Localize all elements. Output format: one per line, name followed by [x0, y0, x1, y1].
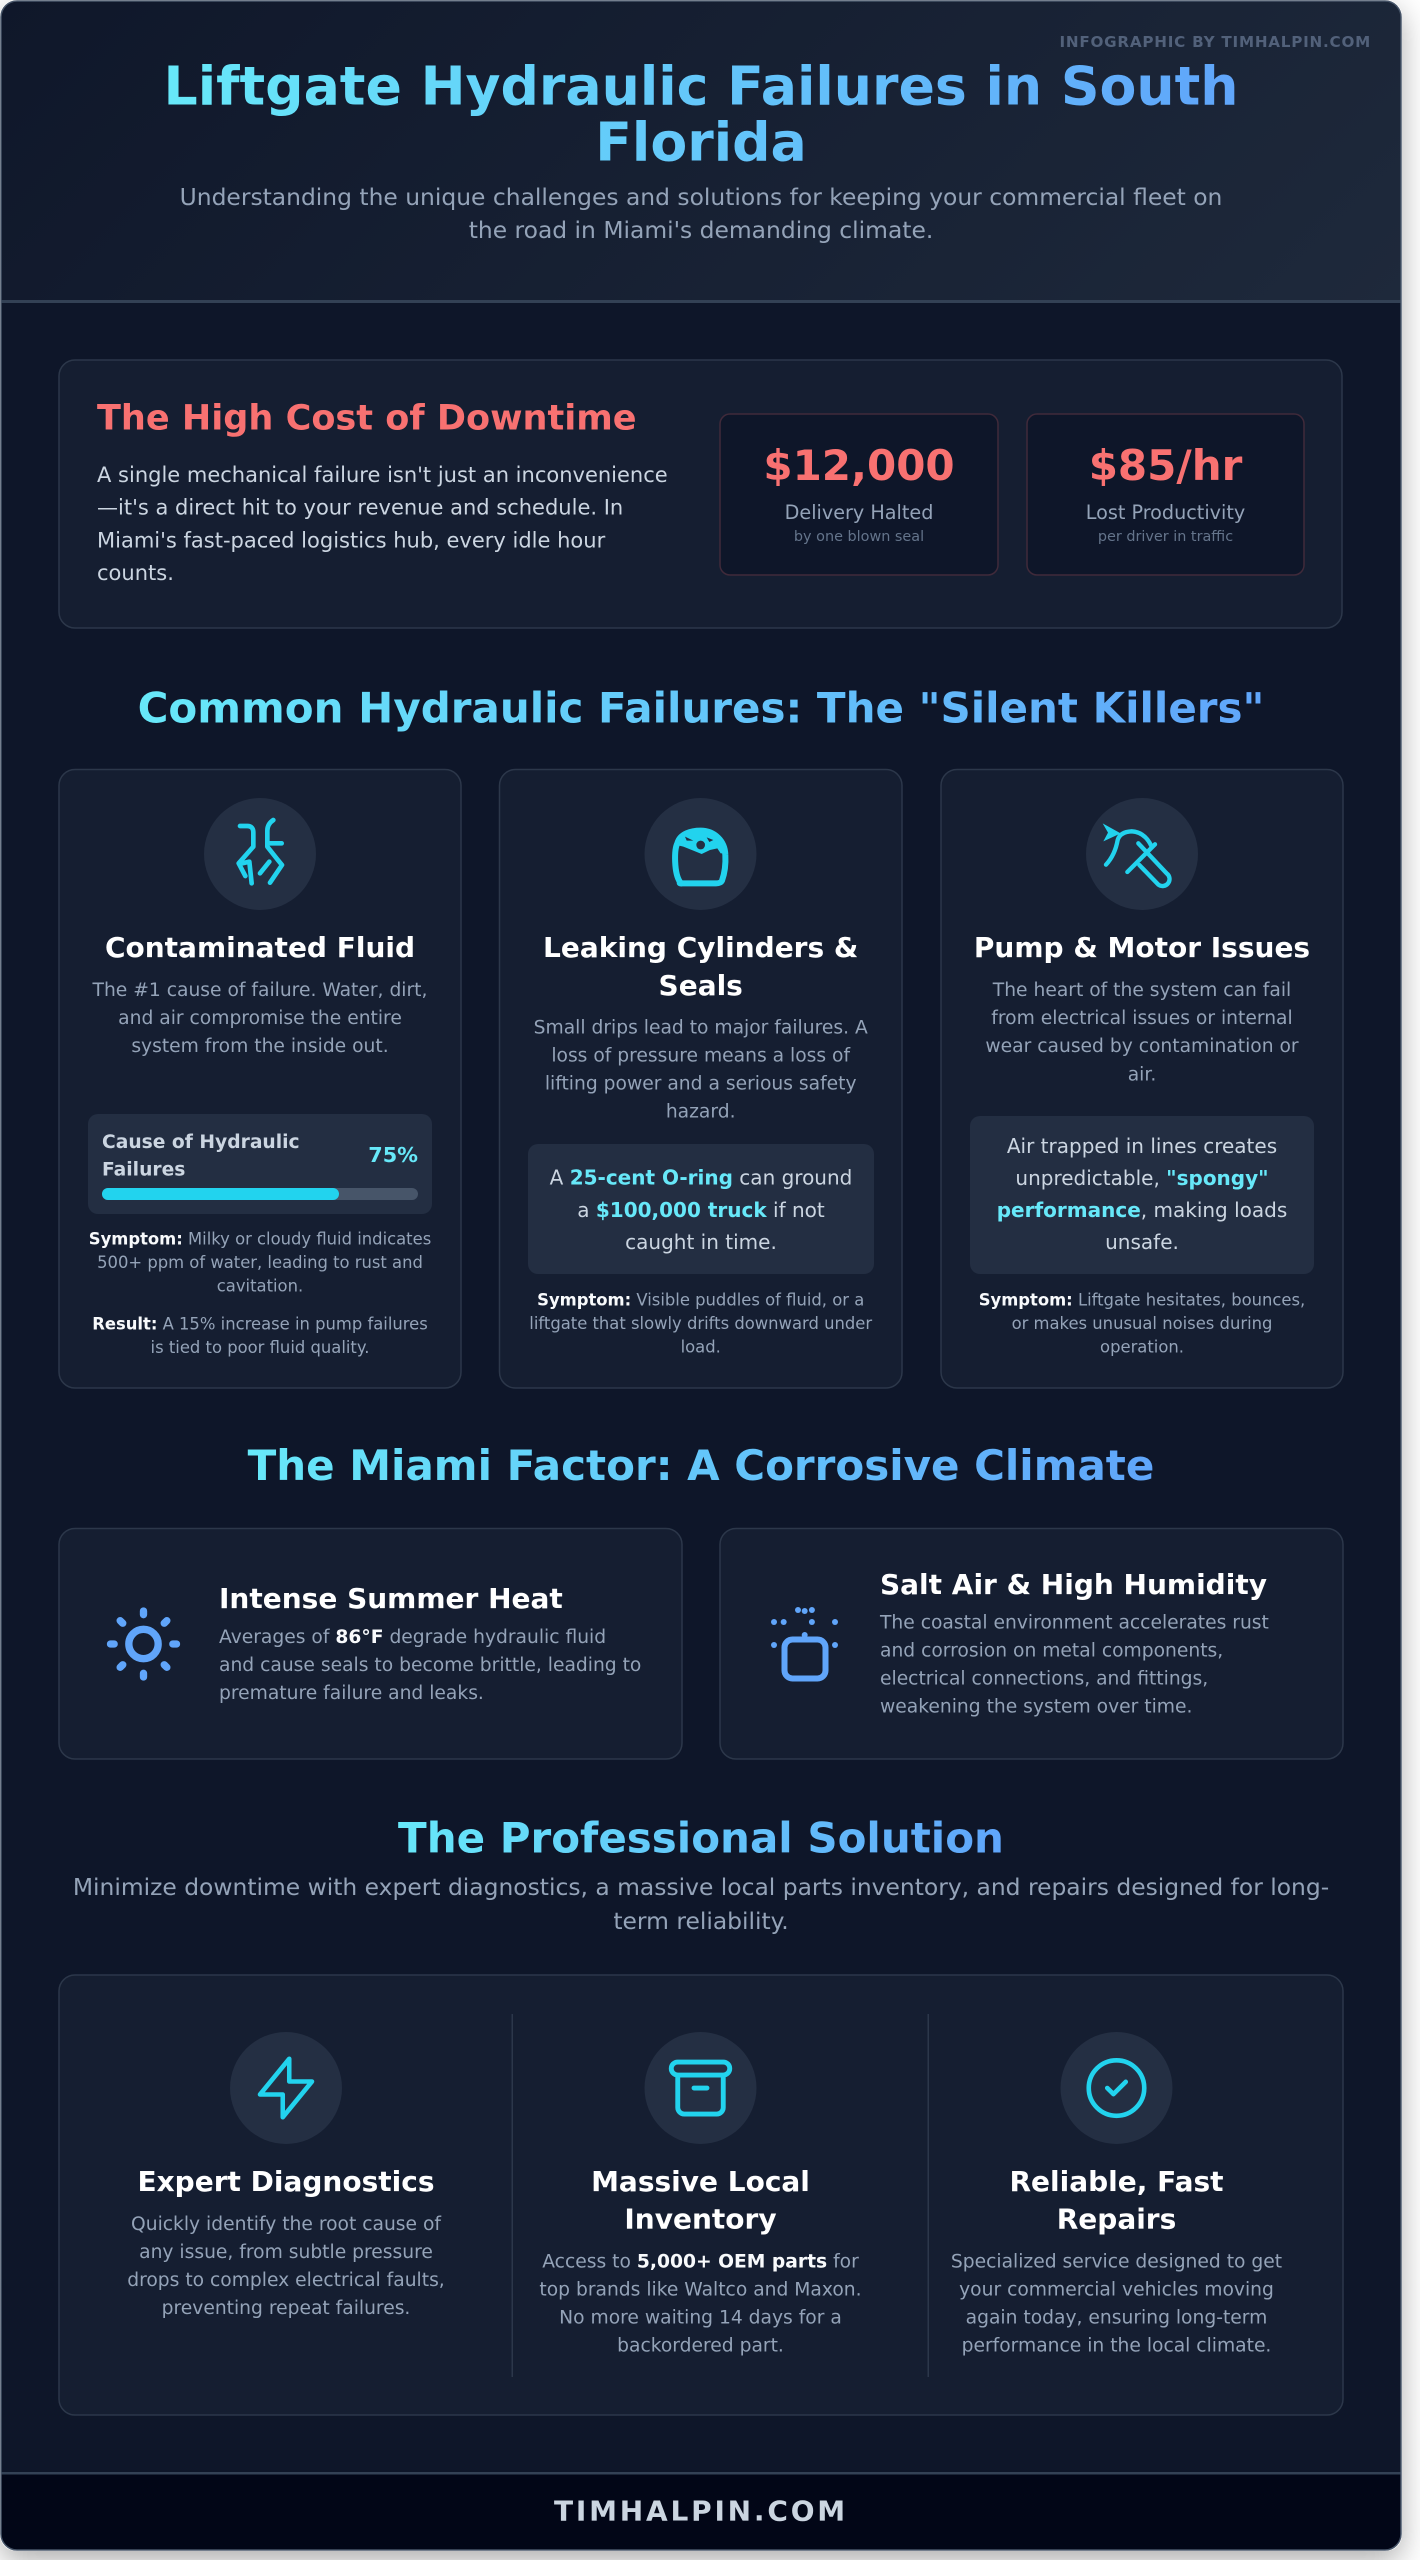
paragraph: cost explanation: Miami's fast-paced logistics hub, every idle hour: [97, 528, 606, 552]
watermark credit: INFOGRAPHIC BY TIMHALPIN.COM: [1060, 33, 1371, 51]
column: massive local inventory: backordered part.: [617, 2336, 784, 2356]
description: hazard.: [666, 1102, 736, 1122]
symptom text: liftgate that slowly drifts downward under: [529, 1314, 872, 1333]
stat: $85/hr lost productivity: [1027, 414, 1304, 575]
callout: 25-cent O-ring: [528, 1144, 874, 1274]
column: massive local inventory: Access to 5,000+ OEM parts for: [542, 2251, 859, 2272]
description: electrical connections, and fittings,: [880, 1669, 1208, 1690]
heading: Pump & Motor Issues: [974, 931, 1310, 964]
heading: Intense Summer Heat: [219, 1582, 563, 1615]
section heading: the professional solution: The Professional Solution: [398, 1814, 1004, 1862]
result text: Result: A 15% increase in pump failures: [92, 1314, 428, 1334]
description: and corrosion on metal components,: [880, 1640, 1223, 1662]
description: and cause seals to become brittle, leading to: [219, 1655, 641, 1676]
column: massive local inventory: [539, 2032, 862, 2356]
column: massive local inventory: top brands like Waltco and Maxon.: [539, 2280, 862, 2300]
symptom text: Symptom: Liftgate hesitates, bounces,: [979, 1291, 1305, 1310]
progress bar: cause of hydraulic failures 75%: 75%: [368, 1143, 418, 1167]
icon: sun: [106, 1607, 180, 1681]
heading: Contaminated Fluid: [105, 931, 415, 964]
stat: $85/hr lost productivity: $85/hr: [1089, 441, 1243, 490]
title: Florida: [595, 110, 807, 174]
progress bar: cause of hydraulic failures 75%: Cause of Hydraulic: [102, 1132, 300, 1153]
description: from electrical issues or internal: [991, 1008, 1293, 1029]
stat: $12,000 delivery halted: $12,000: [763, 441, 955, 490]
symptom text: Symptom: Milky or cloudy fluid indicates: [89, 1230, 431, 1248]
icon: lightning bolt: [230, 2032, 342, 2144]
panel: high cost of downtime: [59, 360, 1342, 628]
heading: Salt Air & High Humidity: [880, 1568, 1267, 1601]
paragraph: cost explanation: counts.: [97, 561, 174, 585]
callout: spongy performance: performance, making loads: [997, 1198, 1287, 1222]
column: reliable fast repairs: [951, 2032, 1282, 2356]
column: reliable fast repairs: Reliable, Fast: [1009, 2165, 1224, 2198]
description: wear caused by contamination or: [985, 1036, 1299, 1057]
description: loss of pressure means a loss of: [551, 1046, 851, 1066]
description: and air compromise the entire: [118, 1008, 402, 1029]
icon: pump and motor tool: [1086, 798, 1198, 910]
footer brand: TIMHALPIN.COM: [554, 2494, 848, 2528]
description: The heart of the system can fail: [992, 980, 1291, 1001]
symptom text: 500+ ppm of water, leading to rust and: [97, 1253, 423, 1272]
description: air.: [1128, 1064, 1156, 1086]
icon: leaking cylinder seal: [644, 798, 756, 910]
section heading: common hydraulic failures: Common Hydraulic Failures: The "Silent Killers": [138, 684, 1264, 732]
header: [1, 1, 1401, 303]
stat: $85/hr lost productivity: per driver in traffic: [1098, 529, 1233, 545]
column: expert diagnostics: Expert Diagnostics: [137, 2165, 435, 2198]
icon: check circle: [1060, 2032, 1172, 2144]
callout: 25-cent O-ring: A 25-cent O-ring can ground: [550, 1166, 852, 1190]
subtitle: Understanding the unique challenges and solutions for keeping your commercial fleet on: [180, 183, 1222, 211]
section heading: the miami factor: The Miami Factor: A Corrosive Climate: [248, 1441, 1154, 1490]
column: massive local inventory: No more waiting 14 days for a: [559, 2308, 842, 2328]
callout: spongy performance: unsafe.: [1105, 1230, 1179, 1254]
footer: [1, 2472, 1401, 2550]
icon: salt air dots and square: [771, 1607, 838, 1678]
description: Averages of 86°F degrade hydraulic fluid: [219, 1627, 606, 1648]
panel: contaminated fluid: [59, 770, 461, 1388]
description: The coastal environment accelerates rust: [879, 1612, 1269, 1633]
callout: 25-cent O-ring: a $100,000 truck if not: [577, 1198, 825, 1222]
stat: $12,000 delivery halted: by one blown seal: [794, 529, 924, 545]
icon: archive box: [644, 2032, 756, 2144]
column: reliable fast repairs: again today, ensuring long-term: [966, 2308, 1267, 2328]
section intro text: term reliability.: [613, 1907, 789, 1935]
description: weakening the system over time.: [880, 1697, 1192, 1718]
column: expert diagnostics: Quickly identify the root cause of: [131, 2214, 441, 2235]
callout: 25-cent O-ring: caught in time.: [625, 1230, 777, 1254]
description: The #1 cause of failure. Water, dirt,: [92, 980, 427, 1001]
symptom text: or makes unusual noises during: [1012, 1314, 1272, 1333]
column: reliable fast repairs: your commercial vehicles moving: [959, 2280, 1274, 2300]
icon: contaminated fluid: [204, 798, 316, 910]
column: reliable fast repairs: Specialized service designed to get: [951, 2251, 1282, 2272]
result text: is tied to poor fluid quality.: [151, 1338, 369, 1357]
title: Liftgate Hydraulic Failures in South: [164, 54, 1238, 118]
heading: the high cost of downtime: The High Cost of Downtime: [97, 398, 637, 438]
panel: intense summer heat: [59, 1528, 682, 1759]
description: Small drips lead to major failures. A: [534, 1018, 868, 1038]
heading: Seals: [659, 969, 743, 1002]
progress bar: cause of hydraulic failures 75%: [88, 1114, 432, 1214]
panel: pump and motor issues: [941, 770, 1343, 1388]
description: lifting power and a serious safety: [545, 1074, 857, 1094]
description: premature failure and leaks.: [219, 1683, 484, 1704]
symptom text: cavitation.: [217, 1276, 303, 1296]
column: expert diagnostics: drops to complex electrical faults,: [127, 2270, 445, 2291]
callout: spongy performance: [970, 1116, 1314, 1274]
paragraph: cost explanation: A single mechanical failure isn't just an inconvenience: [97, 463, 668, 487]
section intro text: Minimize downtime with expert diagnostics, a massive local parts inventory, and repairs designed for long-: [73, 1873, 1329, 1901]
subtitle: the road in Miami's demanding climate.: [469, 216, 933, 244]
symptom text: operation.: [1100, 1338, 1184, 1357]
progress bar: cause of hydraulic failures 75%: Failures: [102, 1160, 185, 1181]
panel: salt air and high humidity: [720, 1528, 1343, 1759]
panel: professional solutions: [59, 1975, 1343, 2415]
stat: $12,000 delivery halted: Delivery Halted: [785, 501, 933, 524]
paragraph: cost explanation: —it's a direct hit to your revenue and schedule. In: [97, 496, 623, 520]
symptom text: load.: [681, 1338, 721, 1357]
column: massive local inventory: Massive Local: [591, 2165, 810, 2198]
description: system from the inside out.: [131, 1036, 389, 1057]
column: expert diagnostics: preventing repeat failures.: [162, 2298, 410, 2319]
symptom text: Symptom: Visible puddles of fluid, or a: [537, 1291, 864, 1310]
callout: spongy performance: Air trapped in lines creates: [1007, 1134, 1277, 1158]
column: reliable fast repairs: performance in the local climate.: [962, 2336, 1271, 2356]
column: reliable fast repairs: Repairs: [1057, 2202, 1176, 2236]
callout: spongy performance: unpredictable, "spongy": [1015, 1166, 1269, 1190]
stat: $85/hr lost productivity: Lost Productivity: [1086, 501, 1245, 524]
column: expert diagnostics: any issue, from subtle pressure: [139, 2242, 433, 2263]
column: massive local inventory: Inventory: [624, 2202, 777, 2236]
panel: leaking cylinders and seals: [500, 770, 902, 1388]
column: expert diagnostics: [127, 2032, 445, 2319]
stat: $12,000 delivery halted: [720, 414, 998, 575]
heading: Leaking Cylinders &: [543, 931, 858, 964]
